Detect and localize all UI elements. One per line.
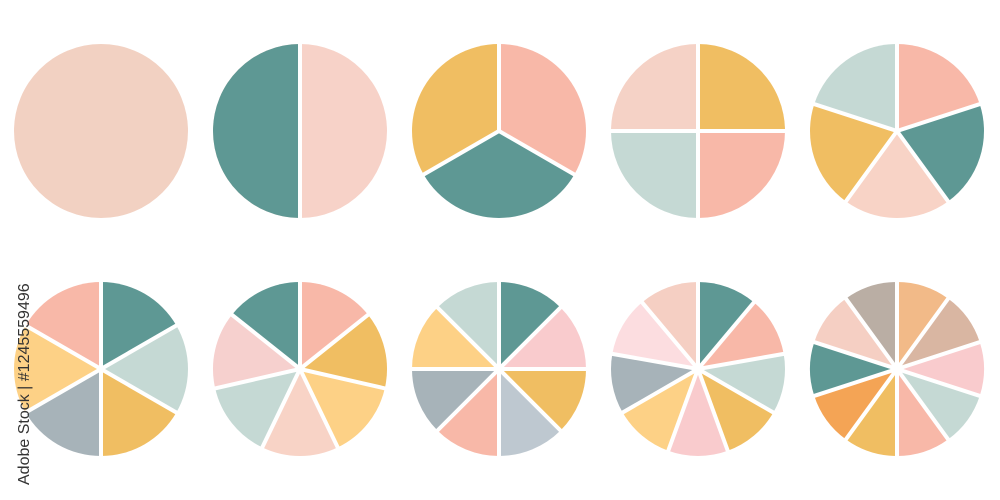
pie: 1 slice [14,44,188,218]
pie: 8 slices [394,264,604,474]
pie: 3 slices [380,34,586,250]
pie: 2 slices [213,41,387,221]
pie: 7 slices [200,262,410,477]
watermark text: Adobe Stock | #1245559496 [16,283,33,485]
pie: 4 slices [608,41,788,221]
pie: 10 slices [798,269,996,469]
pie: 6 slices [0,260,214,478]
pie: 9 slices [595,266,797,470]
pie: 5 slices [779,25,1000,250]
